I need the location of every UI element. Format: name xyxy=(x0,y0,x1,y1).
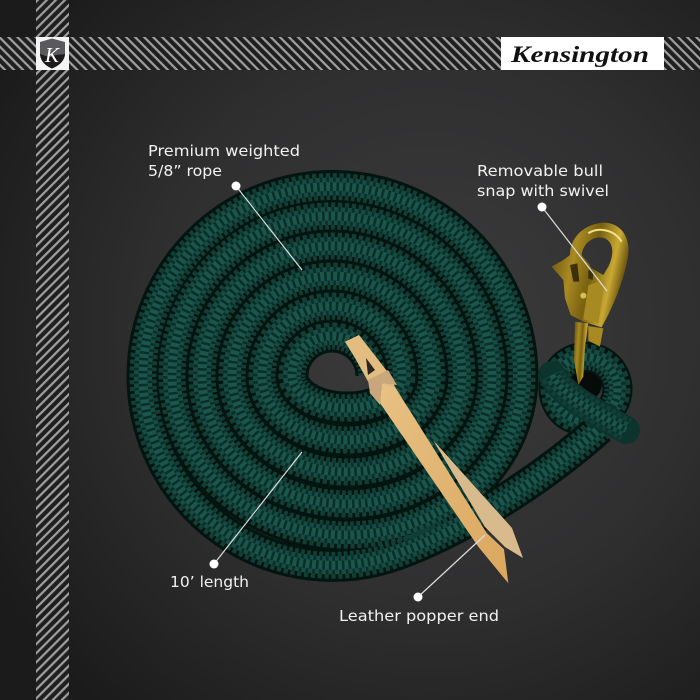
icon: K shield logo: K xyxy=(44,43,60,67)
callout: premium weighted rope: Premium weighted xyxy=(148,142,300,160)
callout: 10 foot length: 10’ length xyxy=(170,573,249,591)
callout: premium weighted rope xyxy=(148,142,302,270)
vertical striped band xyxy=(36,0,69,700)
rope coil xyxy=(143,187,600,565)
callout: removable bull snap xyxy=(477,162,609,291)
callout: removable bull snap: snap with swivel xyxy=(477,182,609,200)
icon: brass bull snap with swivel xyxy=(552,223,629,385)
leather popper end xyxy=(345,335,523,583)
callout: leather popper end xyxy=(339,535,499,625)
callout: removable bull snap: Removable bull xyxy=(477,162,603,180)
horizontal striped band xyxy=(0,37,700,70)
rope knot bar xyxy=(552,375,626,430)
callout: leather popper end: Leather popper end xyxy=(339,607,499,625)
icon: K shield logo xyxy=(36,37,69,70)
callout: 10 foot length xyxy=(170,452,302,591)
callout: premium weighted rope: 5/8” rope xyxy=(148,162,222,180)
logo: Kensington wordmark xyxy=(501,37,664,70)
rope loop at snap end xyxy=(554,357,618,421)
logo: Kensington wordmark: Kensington xyxy=(510,42,649,67)
